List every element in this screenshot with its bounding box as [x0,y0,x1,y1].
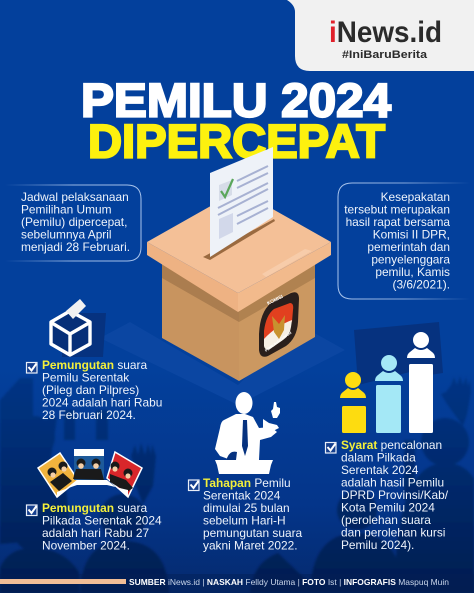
logo wordmark: iNews.id [329,16,442,49]
left info box: (Pemilu) dipercepat, [21,215,127,229]
text: pemungutan pemilu: 28 Februari 2024. [42,408,136,422]
text: pemungutan pilkada: adalah hari Rabu 27 [42,526,149,540]
text: pemungutan pilkada: Pemungutan suara [42,501,147,515]
icon: checkbox [188,480,199,490]
text: tahapan [188,476,303,552]
icon: checkbox [326,442,336,453]
crowd silhouettes [0,376,474,593]
right info box: penyelenggara [371,252,450,266]
text: syarat: Pemilu 2024). [341,538,414,552]
right info box: tersebut merupakan [344,202,450,216]
slot [203,219,275,260]
KPU emblem: PEMILIHAN UMUM [264,331,292,353]
title [81,74,391,168]
lid [147,242,238,312]
icon: speaker at podium [215,392,280,474]
text: pemungutan pilkada: Pilkada Serentak 2024 [42,514,162,528]
KPU emblem [259,292,299,357]
text: syarat: (perolehan suara [341,513,431,527]
text: syarat: dan perolehan kursi [341,526,445,540]
cyan candidate [375,355,403,433]
text: tahapan: sebelum Hari-H [203,514,286,528]
box body [162,255,239,381]
icon: candidate cards [38,449,142,498]
footer credits: SUMBER iNews.id | NASKAH Felldy Utama | FOTO Ist | INFOGRAFIS Maspuq Muin [129,578,449,587]
icon: ballot box outline [51,299,106,357]
ballot box [147,147,331,381]
white candidate [407,332,435,433]
right info box: (3/6/2021). [392,278,450,292]
text: tahapan: Serentak 2024 [203,488,281,502]
right info box: Komisi II DPR, [373,228,450,242]
icon: checkbox [26,362,37,373]
right info box: Kesepakatan [381,190,450,204]
right info box [338,183,470,299]
text: tahapan: yakni Maret 2022. [203,538,298,552]
text: tahapan: pemungutan suara [203,526,303,540]
text: syarat: adalah hasil Pemilu [341,476,444,490]
right info box: pemerintah dan [367,240,450,254]
floor shadow [100,322,345,405]
text: syarat: DPRD Provinsi/Kab/ [341,488,449,502]
left info box: Jadwal pelaksanaan [21,190,129,204]
left info box [5,185,141,261]
left info box: menjadi 28 Februari. [21,240,130,254]
icon: checkbox [26,505,37,516]
icon: rising candidate bars [340,322,443,433]
text: syarat: Kota Pemilu 2024 [341,500,435,514]
right info box: hasil rapat bersama [346,215,450,229]
right info box: pemilu, Kamis [375,265,450,279]
text: pemungutan pemilu [26,358,162,422]
text: syarat: Syarat pencalonan [341,438,442,452]
text: pemungutan pemilu: Pemilu Serentak [42,370,129,384]
KPU emblem: KOMISI [266,294,285,307]
ballot paper [210,147,273,257]
yellow candidate [340,372,366,433]
text: pemungutan pilkada [26,501,162,552]
title: PEMILU 2024 [81,74,391,126]
left info box: sebelumnya April [21,228,112,242]
footer strip [0,579,126,584]
text: tahapan: Tahapan Pemilu [203,476,291,490]
text: pemungutan pemilu: Pemungutan suara [42,358,147,372]
logo panel [287,0,474,71]
left info box: Pemilihan Umum [21,202,112,216]
footer shade [0,574,474,593]
text: pemungutan pemilu: 2024 adalah hari Rabu [42,396,162,410]
text: pemungutan pilkada: November 2024. [42,538,130,552]
text: pemungutan pemilu: (Pileg dan Pilpres) [42,383,139,397]
title: DIPERCEPAT [88,114,385,168]
text: tahapan: dimulai 25 bulan [203,501,290,515]
text: syarat [326,438,449,552]
text: syarat: dalam Pilkada [341,450,416,464]
text: syarat: Serentak 2024 [341,463,419,477]
hashtag: #IniBaruBerita [342,49,428,61]
